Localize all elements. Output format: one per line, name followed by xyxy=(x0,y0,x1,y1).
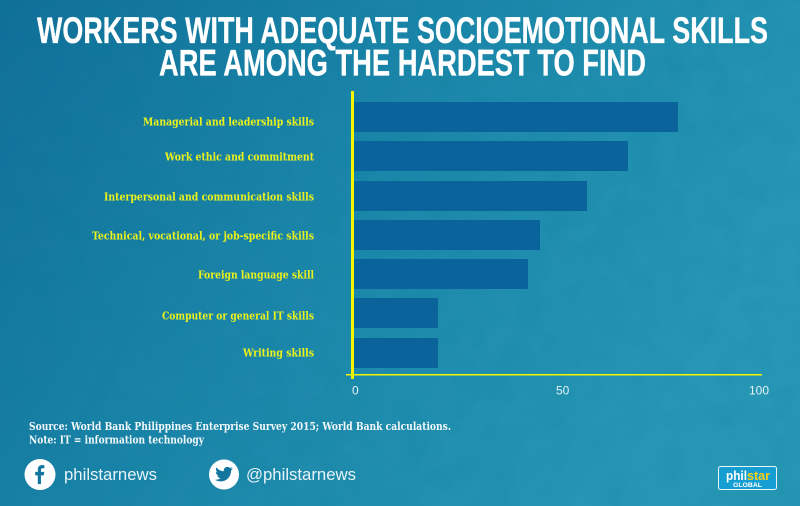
icon: facebook xyxy=(24,459,56,490)
logo: philstar global: phil xyxy=(726,468,747,483)
axis values xyxy=(352,384,769,398)
title xyxy=(37,10,768,84)
axis values: 100 xyxy=(749,384,769,398)
category labels: Work ethic and commitment xyxy=(164,150,315,164)
logo: philstar global xyxy=(718,466,776,490)
axis values: 0 xyxy=(352,384,359,398)
category labels: Computer or general IT skills xyxy=(162,308,314,322)
category labels: Interpersonal and communication skills xyxy=(104,190,314,204)
bar chart xyxy=(92,91,769,398)
category labels: Foreign language skill xyxy=(198,268,314,282)
logo: philstar global: GLOBAL xyxy=(733,483,762,489)
facebook handle: philstarnews xyxy=(64,466,157,484)
logo: philstar global: star xyxy=(747,468,770,483)
twitter handle: @philstarnews xyxy=(246,466,356,484)
source note: Source: World Bank Philippines Enterprise Survey 2015; World Bank calculations. xyxy=(29,419,451,433)
icon: twitter xyxy=(209,460,239,490)
source note xyxy=(29,419,451,446)
source note: Note: IT = information technology xyxy=(29,432,204,446)
category labels: Managerial and leadership skills xyxy=(143,114,314,128)
title: ARE AMONG THE HARDEST TO FIND xyxy=(159,42,646,84)
bars xyxy=(354,102,678,368)
axis values: 50 xyxy=(556,384,570,398)
category labels: Writing skills xyxy=(242,346,314,360)
category labels xyxy=(92,114,315,360)
axes xyxy=(346,91,762,379)
category labels: Technical, vocational, or job-specific skills xyxy=(92,228,314,242)
